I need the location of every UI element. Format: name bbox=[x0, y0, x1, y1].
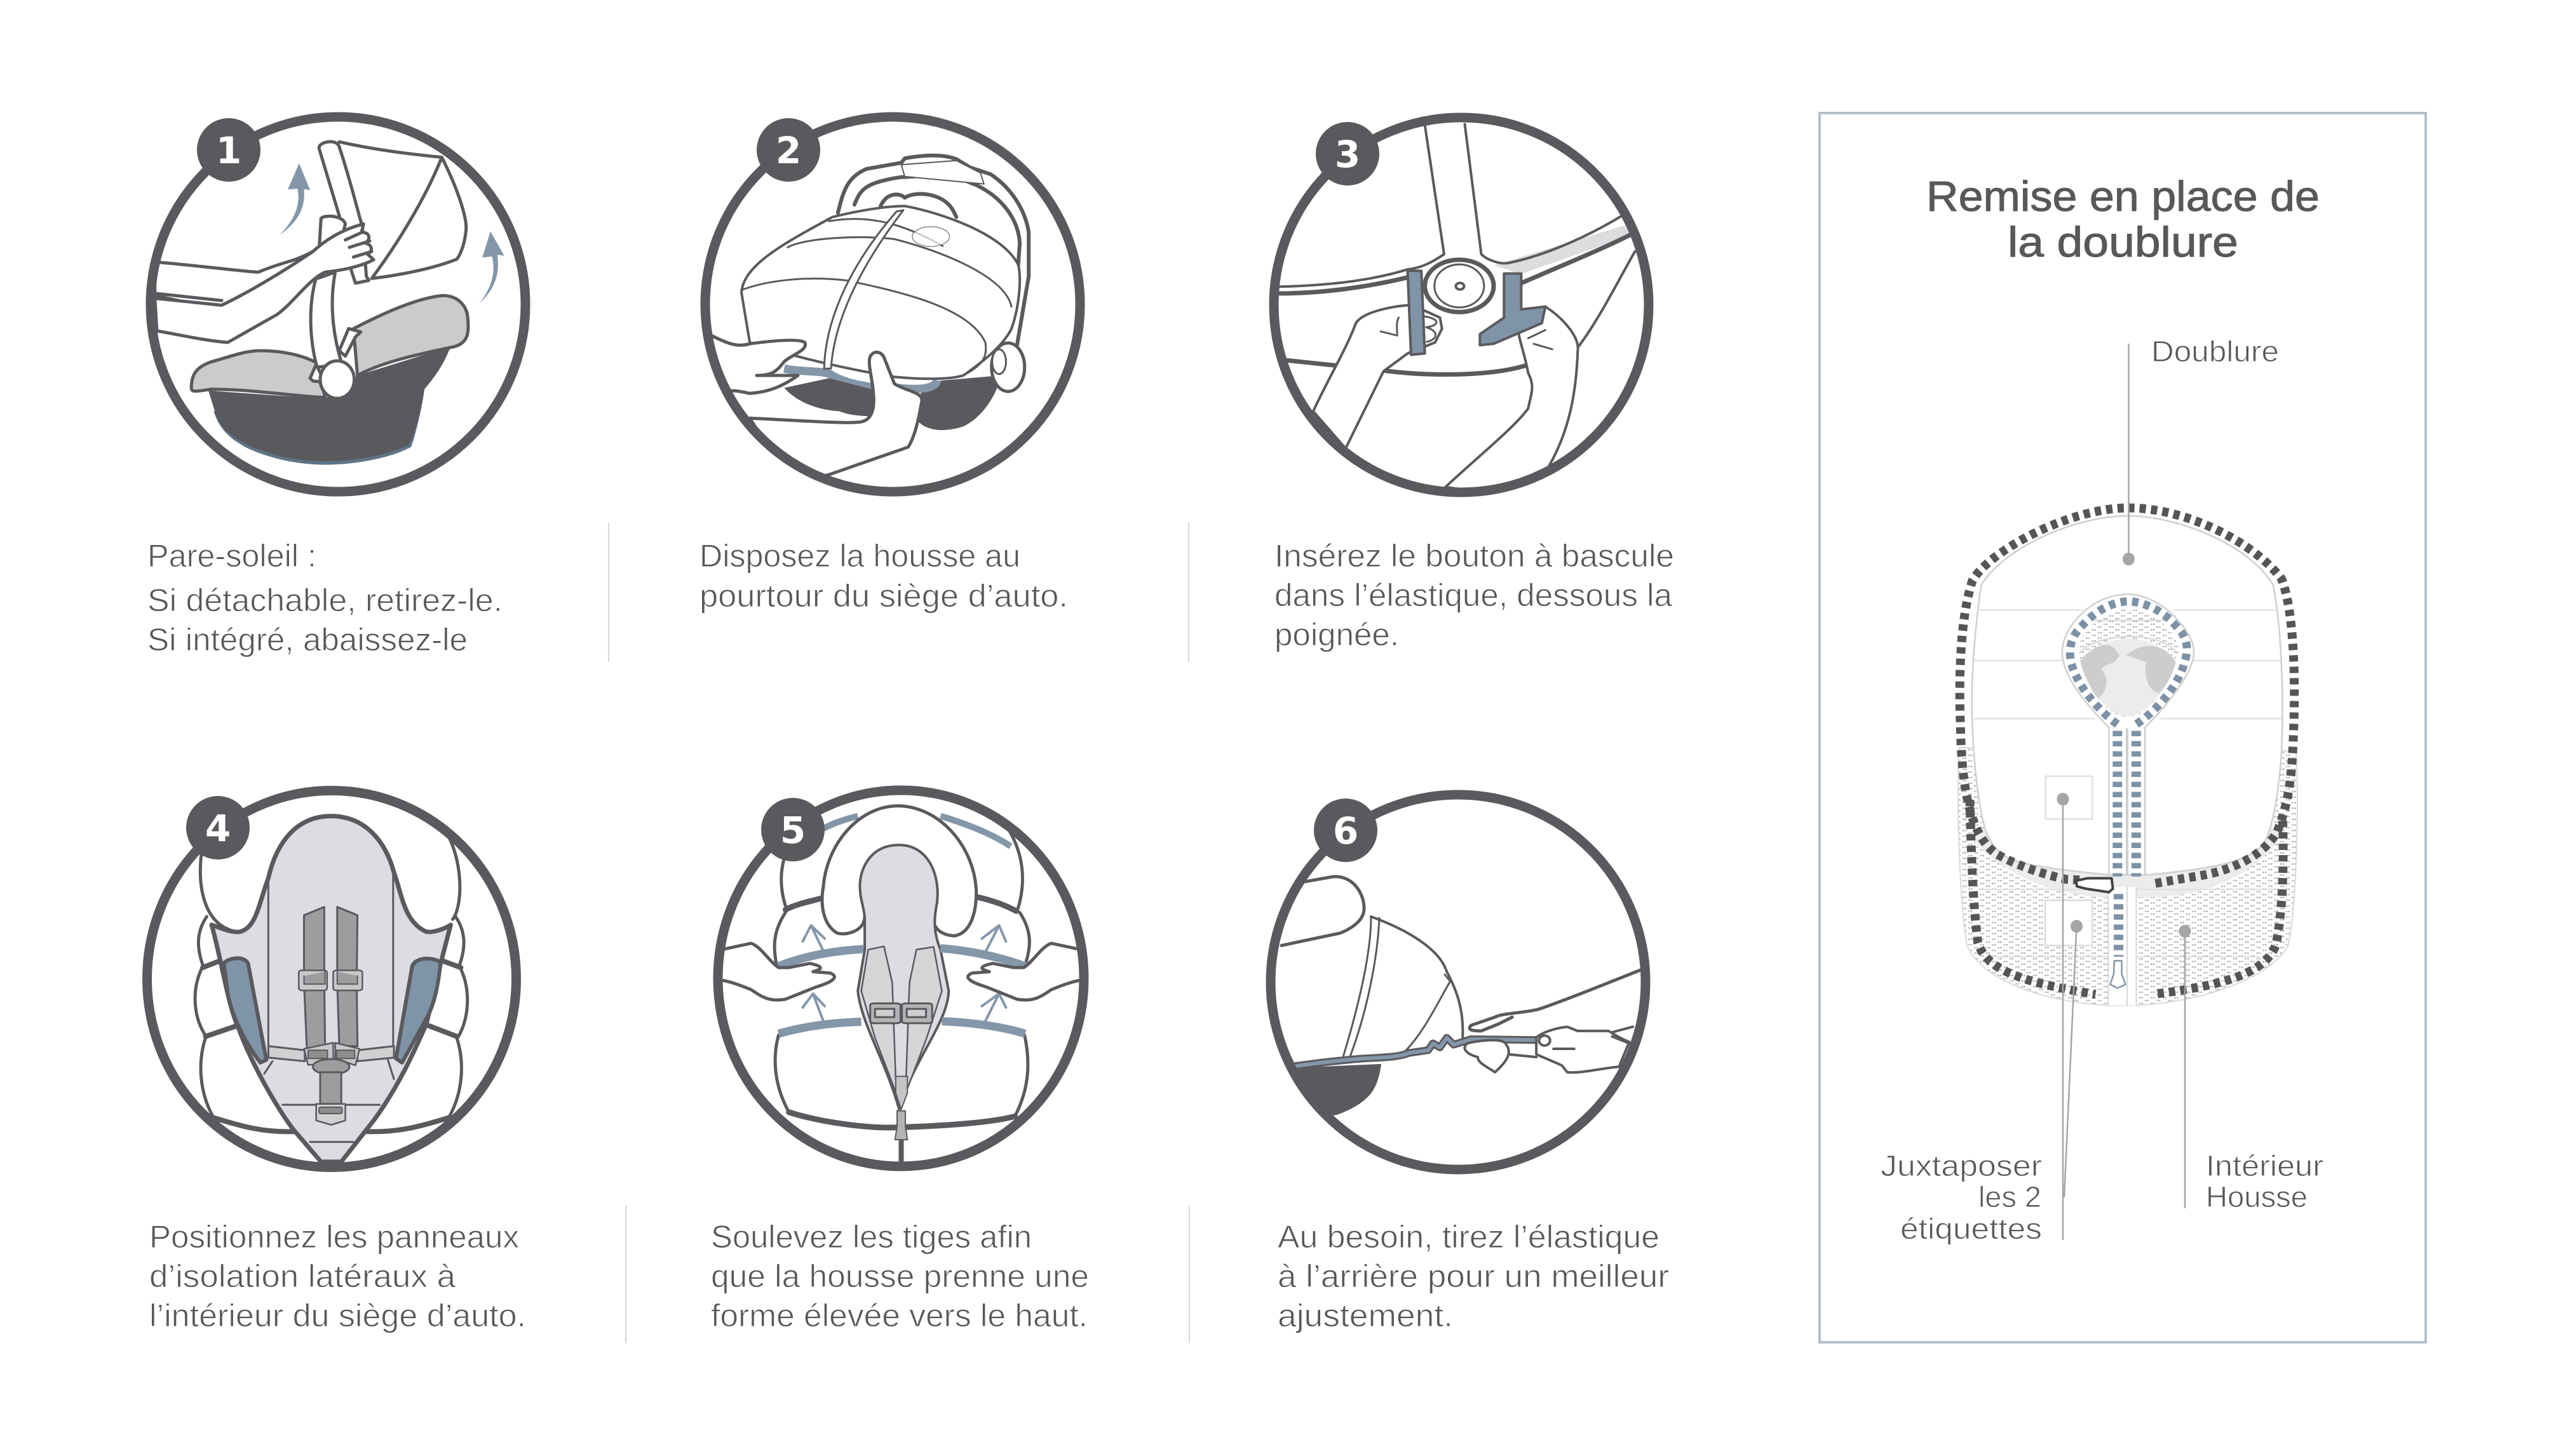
number badge 5 bbox=[761, 798, 825, 861]
panel heading: la doublure bbox=[2008, 219, 2238, 266]
ring 3 bbox=[1274, 118, 1649, 492]
step 6 bbox=[1271, 795, 1669, 1333]
panel frame bbox=[1820, 113, 2426, 1342]
label 1 bbox=[2046, 776, 2092, 819]
number badge 5: 5 bbox=[780, 809, 806, 852]
caption 1 bbox=[147, 538, 503, 657]
zipper stitches bbox=[2118, 731, 2136, 957]
step 5 bbox=[711, 790, 1089, 1333]
caption 3 bbox=[1274, 538, 1674, 652]
blue dashed neck seam bbox=[2070, 601, 2187, 724]
zipper pull bbox=[2076, 879, 2113, 892]
label: juxtaposer: les 2 bbox=[1978, 1180, 2041, 1213]
caption 4: d’isolation latéraux à bbox=[149, 1258, 456, 1294]
lower dashed seam bbox=[1970, 800, 2283, 994]
outer dashed seam bbox=[1960, 508, 2294, 884]
illustration: pulling the elastic bbox=[1281, 877, 1643, 1121]
caption 6: ajustement. bbox=[1278, 1298, 1453, 1333]
label: juxtaposer bbox=[1881, 1149, 2042, 1245]
number badge 2: 2 bbox=[776, 129, 801, 172]
lining sheet bbox=[1972, 516, 2282, 875]
ring 4 bbox=[147, 790, 516, 1168]
caption 2: pourtour du siège d’auto. bbox=[699, 578, 1068, 614]
caption 2 bbox=[699, 538, 1068, 614]
ring 1 bbox=[151, 117, 525, 492]
label: intérieur housse: Intérieur bbox=[2206, 1149, 2323, 1182]
label: juxtaposer: étiquettes bbox=[1900, 1212, 2042, 1245]
number badge 4 bbox=[186, 796, 250, 859]
step 1 bbox=[147, 117, 525, 657]
caption 6: Au besoin, tirez l’élastique bbox=[1278, 1219, 1659, 1255]
illustration: cover around the seat bbox=[701, 156, 1029, 483]
number badge 4: 4 bbox=[205, 807, 231, 850]
label: intérieur housse bbox=[2206, 1149, 2323, 1213]
bottom zipper pull bbox=[2110, 961, 2125, 988]
number badge 1: 1 bbox=[216, 129, 241, 172]
caption 3: Insérez le bouton à bascule bbox=[1274, 538, 1674, 574]
label 2 bbox=[2045, 900, 2092, 945]
caption 5 bbox=[711, 1219, 1089, 1333]
number badge 6: 6 bbox=[1333, 809, 1358, 853]
ring 5 bbox=[718, 790, 1084, 1166]
label: doublure: Doublure bbox=[2151, 335, 2279, 368]
liner diagram bbox=[1958, 508, 2297, 1006]
leader: label 2 bbox=[2064, 920, 2083, 1197]
panel heading: Remise en place de bbox=[1926, 173, 2320, 220]
number badge 2 bbox=[757, 118, 820, 182]
caption 6 bbox=[1278, 1219, 1669, 1333]
caption 4 bbox=[149, 1219, 526, 1333]
label: intérieur housse: Housse bbox=[2206, 1180, 2308, 1213]
leader: interior bbox=[2179, 925, 2191, 1208]
illustration: lifting the rods bbox=[720, 806, 1083, 1162]
caption 4: l’intérieur du siège d’auto. bbox=[149, 1298, 526, 1333]
panel heading bbox=[1926, 173, 2320, 266]
number badge 1 bbox=[197, 118, 260, 182]
caption 1: Pare-soleil : bbox=[147, 538, 316, 574]
step 2 bbox=[699, 117, 1080, 614]
caption 5: Soulevez les tiges afin bbox=[711, 1219, 1032, 1255]
illustration: side insulation panels bbox=[195, 816, 468, 1162]
illustration: sun canopy removal bbox=[155, 142, 504, 465]
zipper channel lower bbox=[2109, 887, 2136, 1006]
step 4 bbox=[147, 790, 526, 1333]
outer cover with dotted interior bbox=[1958, 748, 2297, 1006]
caption 5: forme élevée vers le haut. bbox=[711, 1298, 1088, 1333]
panel: remise en place de la doublure bbox=[1820, 113, 2426, 1342]
leader: doublure bbox=[2123, 344, 2135, 565]
label: juxtaposer: Juxtaposer bbox=[1881, 1149, 2042, 1182]
illustration: toggle button under the handle bbox=[1273, 125, 1635, 502]
ring 6 bbox=[1271, 795, 1646, 1170]
leader: label 1 bbox=[2057, 793, 2069, 1240]
neck opening bbox=[2062, 595, 2194, 875]
caption 4: Positionnez les panneaux bbox=[149, 1219, 519, 1255]
caption 2: Disposez la housse au bbox=[699, 538, 1020, 574]
number badge 3 bbox=[1316, 122, 1379, 185]
lower fold band bbox=[1973, 825, 2281, 898]
number badge 3: 3 bbox=[1335, 133, 1360, 176]
caption 3: dans l’élastique, dessous la bbox=[1274, 577, 1672, 613]
number badge 6 bbox=[1314, 799, 1377, 862]
ring 2 bbox=[705, 117, 1080, 492]
caption 3: poignée. bbox=[1274, 617, 1399, 652]
caption 1: Si intégré, abaissez-le bbox=[147, 622, 468, 657]
step 3 bbox=[1273, 118, 1674, 652]
caption 5: que la housse prenne une bbox=[711, 1258, 1089, 1294]
caption 6: à l’arrière pour un meilleur bbox=[1278, 1258, 1669, 1294]
caption 1: Si détachable, retirez-le. bbox=[147, 583, 503, 618]
